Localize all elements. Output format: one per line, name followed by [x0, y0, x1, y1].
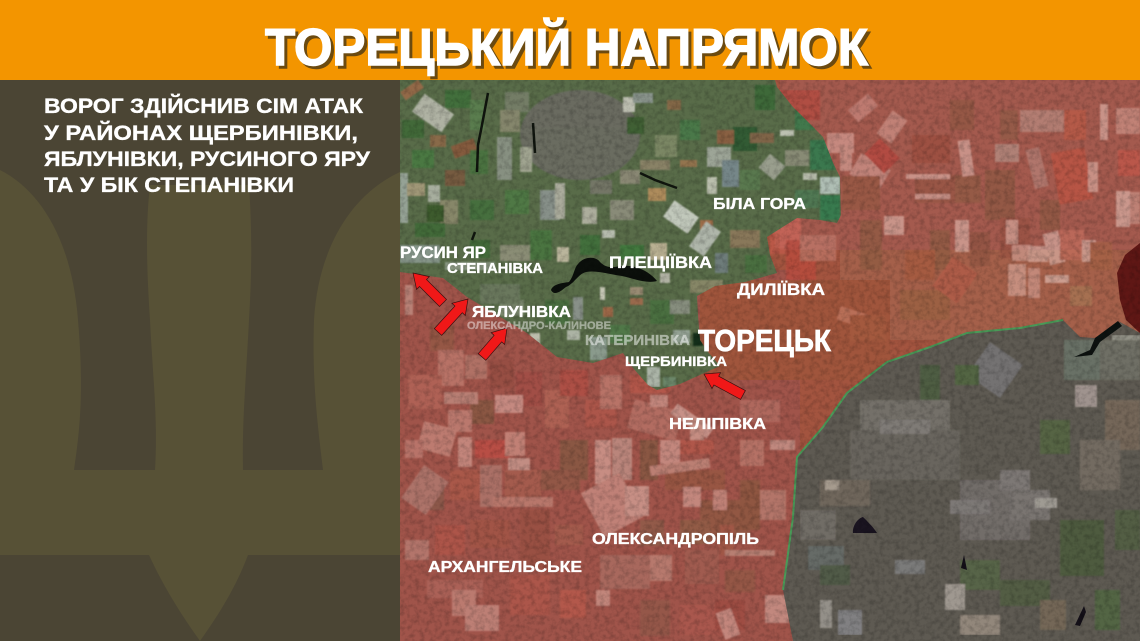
label: Dyliivka: ДИЛІЇВКА [737, 280, 825, 299]
title: ТОРЕЦЬКИЙ НАПРЯМОК [268, 21, 871, 80]
text block: summary: ТА У БІК СТЕПАНІВКИ [44, 174, 294, 197]
map region: occupied red territory [400, 80, 1140, 641]
panel: map [400, 80, 1140, 641]
label: Nelipivka: НЕЛІПІВКА [669, 416, 766, 433]
map region: grey Donetsk-side territory [780, 315, 1140, 641]
label: Katerynivka: КАТЕРИНІВКА [585, 333, 691, 349]
label: Bila Hora: БІЛА ГОРА [713, 196, 806, 213]
arrow: Shcherbynivka attack [704, 373, 745, 399]
panel: left background [0, 80, 400, 641]
text block: summary [44, 94, 371, 197]
icon: trident watermark [0, 170, 400, 641]
map labels [400, 196, 831, 576]
map region: black inlet [1074, 321, 1122, 357]
title: ТОРЕЦЬКИЙ НАПРЯМОК [265, 18, 868, 77]
arrow: Yablunivka attack [434, 299, 468, 335]
text block: summary: ЯБЛУНІВКИ, РУСИНОГО ЯРУ [44, 148, 371, 171]
label: Yablunivka: ЯБЛУНІВКА [472, 304, 571, 321]
text block: summary: ВОРОГ ЗДІЙСНИВ СІМ АТАК [44, 94, 363, 118]
label: Stepanivka: СТЕПАНІВКА [447, 261, 544, 277]
label: Arkhanhelske: АРХАНГЕЛЬСЬКЕ [428, 559, 582, 576]
header band [0, 0, 1140, 80]
map texture: satellite grain [400, 80, 1140, 641]
map region: dark water in the top right [1117, 243, 1140, 333]
label: Toretsk: ТОРЕЦЬК [698, 323, 831, 358]
label: Pleshchiivka: ПЛЕЩІЇВКА [609, 253, 712, 272]
arrows: enemy attacks [413, 273, 745, 399]
label: Shcherbynivka: ЩЕРБИНІВКА [625, 354, 727, 369]
map region: dark rivers and ravines [472, 93, 677, 240]
text block: summary: У РАЙОНАХ ЩЕРБИНІВКИ, [44, 121, 358, 145]
map region: Kleban-Byk reservoir [551, 258, 657, 293]
label: Rusyn Yar: РУСИН ЯР [400, 243, 486, 262]
map line: green front line [783, 320, 1063, 590]
map region: Ukrainian-held green territory [400, 80, 850, 400]
arrow: Rusyn Yar attack [413, 273, 446, 306]
label: Oleksandropil: ОЛЕКСАНДРОПІЛЬ [592, 531, 759, 548]
label: Oleksandro-Kalynove: ОЛЕКСАНДРО-КАЛИНОВЕ [467, 320, 611, 332]
arrow: Oleksandro-Kalynove attack [478, 328, 507, 360]
